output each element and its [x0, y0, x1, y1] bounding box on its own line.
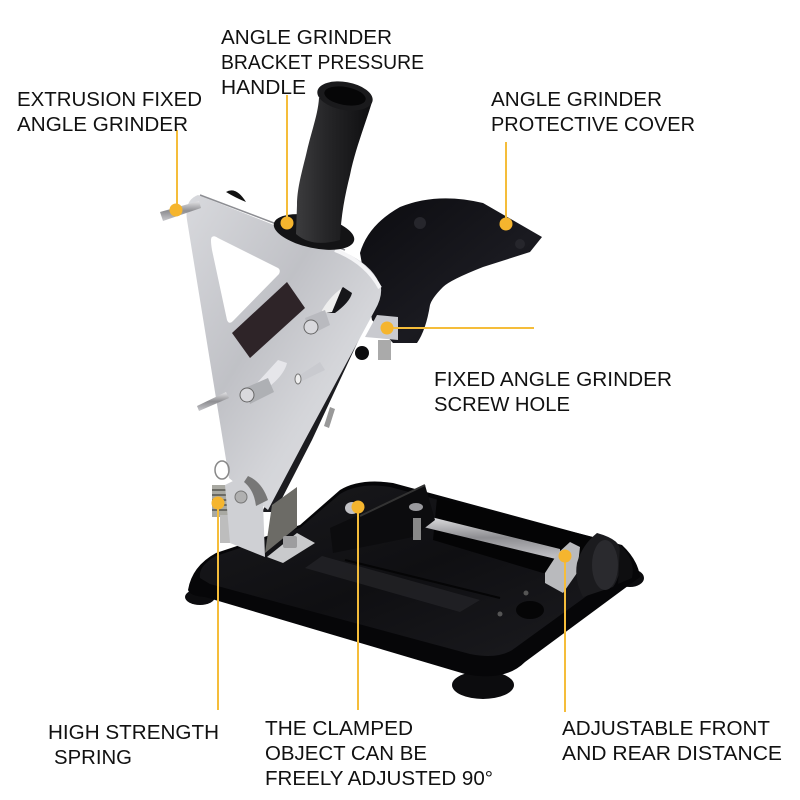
callout: clamped object adjustable 90 degrees: THE CLAMPED	[265, 718, 413, 740]
callout: clamped object adjustable 90 degrees: OBJECT CAN BE	[265, 743, 427, 765]
product illustration: angle grinder stand	[160, 77, 644, 699]
dark rectangular window	[232, 282, 305, 358]
slot lower	[257, 360, 287, 390]
callout: bracket pressure handle: ANGLE GRINDER	[221, 27, 392, 49]
callout: clamped object adjustable 90 degrees	[265, 500, 493, 790]
clamp jaw	[330, 485, 435, 553]
callout: bracket pressure handle: HANDLE	[221, 77, 306, 99]
callout: bracket pressure handle: BRACKET PRESSURE	[221, 52, 424, 74]
triangular cutout	[211, 236, 280, 323]
callout: protective cover: PROTECTIVE COVER	[491, 114, 695, 136]
callout: high strength spring: HIGH STRENGTH	[48, 722, 219, 744]
callout: fixed angle grinder screw hole: SCREW HOLE	[434, 394, 570, 416]
small black tab behind bracket	[226, 190, 246, 202]
callout: adjustable front and rear distance	[558, 550, 782, 765]
base feet	[185, 569, 644, 699]
callout: bracket pressure handle	[221, 27, 424, 230]
callout: extrusion fixed angle grinder	[17, 89, 202, 216]
callout: clamped object adjustable 90 degrees: FREELY ADJUSTED 90°	[265, 768, 493, 790]
callout: extrusion fixed angle grinder: EXTRUSION FIXED	[17, 89, 202, 111]
callout: high strength spring: SPRING	[54, 747, 132, 769]
bolts on bracket	[160, 201, 398, 428]
callout: extrusion fixed angle grinder: ANGLE GRINDER	[17, 114, 188, 136]
callout: adjustable front and rear distance: ADJUSTABLE FRONT	[562, 718, 770, 740]
callout: adjustable front and rear distance: AND REAR DISTANCE	[562, 743, 782, 765]
callout: protective cover	[491, 89, 695, 230]
threaded rod	[423, 515, 560, 560]
slot upper	[320, 287, 352, 313]
base plate	[188, 482, 640, 676]
adjusting block and knob	[545, 533, 633, 597]
chrome bracket	[186, 195, 382, 512]
callout: fixed angle grinder screw hole	[380, 322, 672, 416]
callout: fixed angle grinder screw hole: FIXED ANGLE GRINDER	[434, 369, 672, 391]
callout: high strength spring	[48, 496, 224, 769]
grip handle	[271, 77, 375, 256]
spring and hinge assembly	[212, 461, 315, 563]
callout: protective cover: ANGLE GRINDER	[491, 89, 662, 111]
clamp rail	[433, 498, 593, 575]
guard: protective cover	[360, 198, 542, 343]
